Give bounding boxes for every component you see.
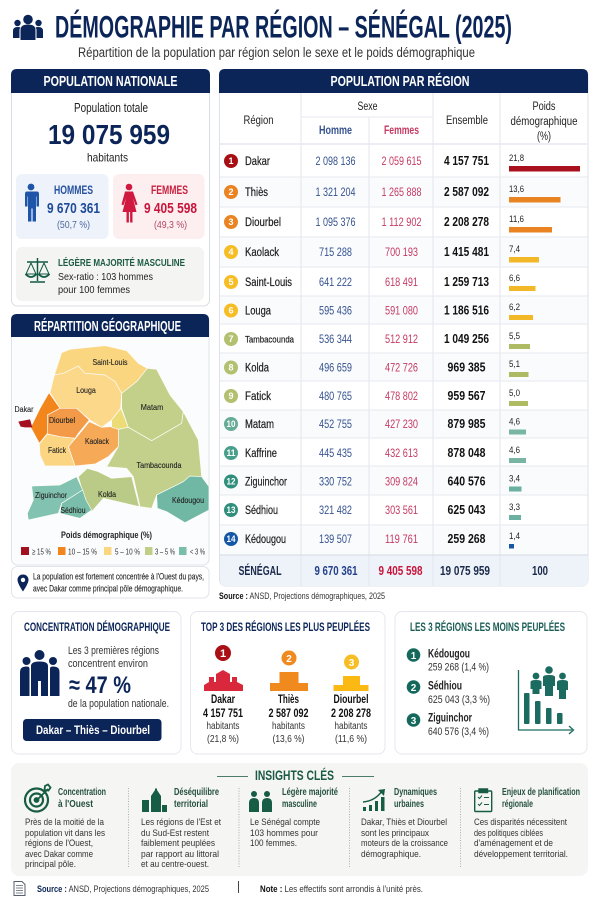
row: Thiès: 2 587 092 — [444, 185, 489, 199]
insight heading: masculine — [282, 799, 317, 810]
row: Louga: 595 436 — [319, 306, 352, 318]
row: Sédhiou: 321 482 — [319, 505, 352, 517]
top 2: Thiès: habitants — [272, 721, 305, 732]
insight body: Ces disparités nécessitent — [474, 817, 567, 827]
insight body: avec Dakar comme — [25, 849, 93, 859]
text: note carte: La population est fortement concentrée à l'Ouest du pays, — [33, 572, 204, 582]
row: Ziguinchor: 3,4 — [509, 474, 520, 484]
icon: growth chart — [363, 789, 385, 811]
icon: map pin — [18, 574, 28, 592]
row: Sédhiou — [224, 502, 521, 520]
map labels: Ziguinchor — [35, 490, 67, 500]
row: Saint-Louis: 5 — [228, 277, 234, 287]
text: note carte: avec Dakar comme principal pôle démographique. — [33, 584, 183, 594]
legend: poids démographique: 3 – 5 % — [155, 546, 175, 556]
row: Tambacounda: 536 344 — [319, 334, 352, 346]
text: 3 premières régions: concentrent environ — [68, 658, 148, 670]
insight body: moteurs de la croissance — [361, 838, 448, 848]
row: Dakar: 2 098 136 — [316, 156, 356, 168]
item: Kédougou: 259 268 (1,4 %) — [428, 662, 489, 674]
text: sex-ratio: pour 100 femmes — [58, 284, 130, 296]
insight: enjeux de planification — [474, 787, 580, 859]
big number: 47 %: ≈ 47 % — [69, 672, 131, 699]
table header labels: Sexe — [358, 101, 378, 113]
top 1: Dakar: (21,8 %) — [207, 734, 239, 745]
number: hommes: 9 670 361 — [47, 201, 100, 217]
header: répartition géographique — [11, 314, 209, 337]
row: Diourbel: 1 112 902 — [382, 217, 422, 229]
insight heading: urbaines — [394, 799, 424, 810]
insight heading: territorial — [174, 799, 208, 810]
top 2: Thiès: (13,6 %) — [272, 734, 304, 745]
row: Dakar: 21,8 — [509, 153, 524, 163]
row: Sédhiou: 3,3 — [509, 502, 520, 512]
insight heading: régionale — [502, 799, 533, 810]
top 3: Diourbel: 3 — [349, 658, 355, 669]
row: Ziguinchor: 330 752 — [319, 476, 352, 488]
icon: clipboard checklist — [475, 789, 492, 812]
icon: three people — [20, 650, 60, 696]
callout: légère majorité masculine — [16, 247, 204, 301]
row: Matam: 427 230 — [385, 419, 418, 431]
row: Diourbel: 2 208 278 — [444, 215, 489, 229]
top 1: Dakar: 1 — [220, 648, 226, 660]
map labels: Dakar — [14, 404, 34, 414]
row: Louga: Louga — [245, 306, 271, 318]
row: Dakar: 4 157 751 — [444, 154, 489, 168]
row: Kaffrine: 11 — [226, 448, 236, 458]
row: Fatick: 478 802 — [385, 391, 418, 403]
row: Kolda: 969 385 — [448, 360, 486, 374]
row: Kaolack: 715 288 — [319, 247, 352, 259]
row: Dakar: 2 059 615 — [382, 156, 422, 168]
row: Kolda: 8 — [228, 362, 234, 372]
row: Kaolack: Kaolack — [245, 247, 279, 259]
row: Kolda: Kolda — [245, 362, 269, 374]
badge: Dakar – Thiès – Diourbel: Dakar – Thiès – Diourbel — [36, 723, 150, 737]
row: Sédhiou: 13 — [226, 505, 236, 515]
row: Diourbel: 3 — [228, 217, 234, 227]
row: Fatick — [224, 388, 528, 406]
row: Matam: 452 755 — [319, 419, 352, 431]
item: Kédougou — [407, 648, 489, 674]
text: 3 premières régions — [68, 645, 159, 670]
insight body: du Sud-Est restent — [141, 828, 209, 838]
insight body: d'aménagement et de — [474, 838, 553, 848]
number: femmes: 9 405 598 — [144, 201, 197, 217]
insight body — [361, 817, 448, 859]
text: sex-ratio — [58, 271, 153, 296]
panel: population nationale — [11, 69, 210, 306]
legend: poids démographique — [21, 530, 205, 556]
row: total Sénégal: SÉNÉGAL — [238, 563, 282, 578]
row: Kédougou: 119 761 — [385, 534, 418, 546]
item: Kédougou: 1 — [411, 651, 417, 662]
row: Saint-Louis: 6,6 — [509, 273, 520, 283]
map labels: Matam — [141, 402, 163, 412]
table: row backgrounds and grid — [220, 93, 588, 586]
row: Ziguinchor: Ziguinchor — [245, 476, 287, 488]
table header labels: Poids — [532, 101, 556, 113]
top 2: Thiès: 2 587 092 — [268, 706, 309, 720]
top 1: Dakar — [203, 645, 243, 745]
header: population par région: POPULATION PAR RÉGION — [330, 73, 470, 90]
panel: répartition géographique — [11, 314, 209, 565]
row: Kolda: 472 726 — [385, 362, 418, 374]
row: Kaffrine: Kaffrine — [245, 448, 277, 460]
row: Tambacounda: 512 912 — [385, 334, 418, 346]
row: Thiès: 1 321 204 — [316, 187, 356, 199]
insight heading — [502, 787, 580, 810]
row: Sédhiou: 625 043 — [448, 503, 486, 517]
row: Kédougou: 1,4 — [509, 531, 520, 541]
header: population nationale — [11, 69, 210, 93]
insight body — [141, 817, 221, 869]
insight body: sont les principaux — [361, 828, 429, 838]
legend: poids démographique: ≥ 15 % — [32, 546, 51, 556]
icon: buildings — [142, 788, 167, 812]
map labels: Sédhiou — [60, 505, 86, 515]
icon: buildings — [204, 670, 243, 691]
header: population par région — [219, 69, 588, 93]
row: total Sénégal: 19 075 959 — [440, 563, 490, 578]
footer source: Source : ANSD, Projections démographiques, 2025 — [37, 884, 209, 894]
row: Thiès: 2 — [228, 187, 234, 197]
item: Sédhiou: 625 043 (3,3 %) — [428, 694, 490, 706]
top 3: Diourbel — [331, 654, 371, 745]
row: total Sénégal: 100 — [532, 563, 548, 578]
row: Sédhiou: Sédhiou — [245, 505, 278, 517]
row: Tambacounda: 5,5 — [509, 331, 520, 341]
row: Kolda: 5,1 — [509, 359, 520, 369]
table header labels: Ensemble — [446, 115, 488, 127]
row: Matam: 879 985 — [448, 417, 486, 431]
insight body: 100 femmes. — [250, 838, 297, 848]
row: Kaffrine: 4,6 — [509, 445, 520, 455]
footer note: Note : Les effectifs sont arrondis à l'unité près. — [260, 884, 423, 894]
row: Kaolack: 7,4 — [509, 244, 520, 254]
row: Matam: 10 — [226, 419, 236, 429]
map labels: Louga — [76, 385, 96, 395]
icon: orange podium — [270, 672, 308, 691]
map of Senegal — [14, 346, 209, 523]
table header labels: Région — [244, 115, 274, 127]
source: table: Source : ANSD, Projections démographiques, 2025 — [219, 591, 385, 601]
top 3: Diourbel: (11,6 %) — [335, 734, 367, 745]
row: Diourbel: 11,6 — [509, 214, 524, 224]
icon: man — [25, 184, 39, 222]
row: Saint-Louis: 618 491 — [385, 277, 418, 289]
insight heading — [394, 787, 437, 810]
insight body: par rapport au littoral — [141, 849, 219, 859]
badge: Dakar – Thiès – Diourbel — [23, 719, 162, 741]
row: Louga: 6,2 — [509, 302, 520, 312]
row: Ziguinchor: 12 — [226, 476, 236, 486]
insight: concentration à l'Ouest — [25, 784, 106, 869]
label: habitants: habitants — [87, 150, 128, 164]
row: Matam: Matam — [245, 419, 274, 431]
insight body — [250, 817, 320, 848]
row: Fatick: 480 765 — [319, 391, 352, 403]
legend: poids démographique: 5 – 10 % — [115, 546, 140, 556]
row: total Sénégal: 9 405 598 — [378, 563, 422, 578]
row: Tambacounda: 7 — [228, 334, 234, 344]
insight heading: Légère majorité — [282, 787, 338, 798]
icon: two people — [249, 791, 272, 812]
card: concentration démographique — [12, 612, 181, 754]
top 3: Diourbel: 2 208 278 — [331, 706, 371, 720]
row: Ziguinchor: 640 576 — [448, 474, 486, 488]
insight body: démographique. — [361, 849, 421, 859]
row: Kaffrine: 445 435 — [319, 448, 352, 460]
icon: woman — [122, 184, 138, 222]
insight heading — [58, 787, 106, 810]
row: Kaolack: 1 415 481 — [444, 245, 489, 259]
row: Kédougou: 139 507 — [319, 534, 352, 546]
insight heading: Concentration — [58, 787, 106, 798]
heading: insights clés: INSIGHTS CLÉS — [255, 767, 334, 783]
text: femmes: FEMMES — [151, 183, 188, 197]
insight heading — [282, 787, 338, 810]
subtitle: Répartition de la population par région selon le sexe et le poids démographique — [78, 45, 475, 60]
map labels: Saint-Louis — [92, 357, 128, 367]
row: Kaffrine: 432 613 — [385, 448, 418, 460]
legend: poids démographique: 10 – 15 % — [68, 546, 97, 556]
row: Fatick: 5,0 — [509, 388, 520, 398]
table header labels: Homme — [319, 125, 352, 137]
top 3: Diourbel: habitants — [334, 721, 368, 732]
text: sex-ratio: Sex-ratio : 103 hommes — [58, 271, 153, 283]
icon: scales — [26, 258, 50, 282]
insight body: Près de la moitié de la — [25, 817, 105, 827]
item: Ziguinchor: 3 — [411, 716, 417, 727]
row: Tambacounda: Tambacounda — [245, 334, 295, 346]
row: Dakar: 1 — [228, 156, 234, 166]
row: Louga: 591 080 — [385, 306, 418, 318]
card: moins peuplées — [395, 612, 587, 754]
row: Saint-Louis: 641 222 — [319, 277, 352, 289]
row: Tambacounda: 1 049 256 — [444, 332, 489, 346]
insight body: population vit dans les — [25, 828, 105, 838]
row: total Sénégal: 9 670 361 — [314, 563, 358, 578]
row: Thiès: 1 265 888 — [382, 187, 422, 199]
insight body: 103 hommes pour — [250, 828, 318, 838]
table header labels: démographique — [510, 116, 578, 128]
row: Kolda — [224, 359, 528, 377]
table header labels — [244, 101, 578, 143]
row: Fatick: 9 — [228, 391, 234, 401]
text: 3 premières régions: Les 3 premières régions — [68, 645, 159, 657]
map labels: Kaolack — [85, 436, 110, 446]
insight: légère majorité masculine — [249, 787, 338, 848]
row: Kaffrine — [224, 445, 526, 463]
row: Kédougou: 259 268 — [448, 532, 486, 546]
insight body: des politiques ciblées — [474, 828, 543, 838]
item: Kédougou: Kédougou — [428, 648, 470, 660]
insight body: Le Sénégal compte — [250, 817, 320, 827]
top 1: Dakar: 4 157 751 — [203, 706, 243, 720]
total population number: 19 075 959 — [48, 119, 170, 150]
icon: document — [14, 882, 25, 896]
text: note carte — [33, 572, 204, 594]
top 2: Thiès: 2 — [286, 654, 292, 665]
card: top 3 régions — [190, 612, 385, 754]
row: Thiès: Thiès — [245, 187, 268, 199]
percent: hommes: (50,7 %) — [57, 219, 90, 231]
row: Diourbel — [224, 214, 552, 232]
map labels: Tambacounda — [136, 460, 182, 470]
card: femmes — [113, 174, 204, 239]
row: Thiès — [224, 184, 560, 202]
row: Saint-Louis: Saint-Louis — [245, 277, 292, 289]
row: Kaolack: 700 193 — [385, 247, 418, 259]
item: Sédhiou: Sédhiou — [428, 680, 462, 692]
legend: poids démographique: < 3 % — [190, 546, 205, 556]
row: Fatick: 959 567 — [448, 389, 486, 403]
top 1: Dakar: Dakar — [211, 694, 235, 706]
insight heading: Déséquilibre — [174, 787, 219, 798]
item: Ziguinchor — [407, 712, 489, 738]
row: Kédougou — [224, 531, 520, 548]
heading: top 3: TOP 3 DES RÉGIONS LES PLUS PEUPLÉES — [201, 619, 370, 634]
icon: people group — [13, 15, 43, 40]
top 3: Diourbel: Diourbel — [334, 694, 368, 706]
icon: yellow podium — [334, 676, 368, 691]
map labels: Kolda — [98, 489, 116, 499]
row: Tambacounda — [224, 331, 530, 349]
insight body: Les régions de l'Est et — [141, 817, 221, 827]
panel: insights clés — [11, 763, 588, 876]
header: répartition géographique: RÉPARTITION GÉOGRAPHIQUE — [34, 318, 181, 335]
insight body: régions de l'Ouest, — [25, 838, 93, 848]
header: population nationale: POPULATION NATIONALE — [44, 73, 178, 90]
row: Louga: 1 186 516 — [444, 304, 489, 318]
icon: target — [25, 784, 50, 812]
row: Dakar: Dakar — [245, 156, 270, 168]
label: population totale: Population totale — [74, 101, 148, 115]
row: Kaolack — [224, 244, 539, 262]
row: Ziguinchor — [224, 474, 522, 492]
row: Diourbel: 1 095 376 — [316, 217, 356, 229]
insight body: développement territorial. — [474, 849, 568, 859]
row: Kaolack: 4 — [228, 247, 234, 257]
table header labels: Femmes — [384, 125, 419, 137]
row: Diourbel: Diourbel — [245, 217, 281, 229]
insight body: et au centre-ouest. — [141, 859, 209, 869]
row: Saint-Louis — [224, 273, 536, 291]
insight body — [25, 817, 105, 869]
callout: concentration à l'Ouest — [12, 566, 209, 598]
map labels: Fatick — [48, 445, 67, 455]
item: Ziguinchor: Ziguinchor — [428, 712, 472, 724]
item: Sédhiou — [407, 680, 490, 706]
map labels: Diourbel — [49, 415, 75, 425]
heading: concentration: CONCENTRATION DÉMOGRAPHIQUE — [24, 619, 170, 634]
icon: bar chart with people — [518, 666, 574, 734]
row: Kédougou: 14 — [226, 534, 236, 544]
row: Kédougou: Kédougou — [245, 534, 286, 546]
row: Sédhiou: 303 561 — [385, 505, 418, 517]
top 2: Thiès — [268, 650, 309, 745]
map labels: Kédougou — [172, 495, 204, 505]
insight heading — [174, 787, 219, 810]
row: Louga — [224, 302, 533, 320]
item: Ziguinchor: 640 576 (3,4 %) — [428, 726, 489, 738]
text: hommes: HOMMES — [54, 183, 93, 197]
row: total Sénégal — [238, 563, 548, 578]
row: Kolda: 496 659 — [319, 362, 352, 374]
row: Matam — [224, 416, 526, 434]
map labels — [14, 357, 204, 515]
panel: population par région — [219, 69, 588, 586]
row: Matam: 4,6 — [509, 416, 520, 426]
row: Thiès: 13,6 — [509, 184, 524, 194]
top 1: Dakar: habitants — [206, 721, 240, 732]
insight body — [474, 817, 568, 859]
insight body: faiblement peuplées — [141, 838, 215, 848]
insight heading: à l'Ouest — [58, 799, 94, 810]
insight body: Dakar, Thiès et Diourbel — [361, 817, 447, 827]
legend: poids démographique: Poids démographique (%) — [61, 530, 152, 541]
insight: dynamiques urbaines — [361, 787, 448, 859]
insight heading: Dynamiques — [394, 787, 437, 798]
row: Saint-Louis: 1 259 713 — [444, 275, 489, 289]
heading: légère majorité: LÉGÈRE MAJORITÉ MASCULINE — [58, 256, 185, 269]
row: Fatick: Fatick — [245, 391, 271, 403]
text: population nationale: de la population nationale. — [68, 698, 169, 710]
top 2: Thiès: Thiès — [278, 694, 299, 706]
row: Louga: 6 — [228, 306, 234, 316]
item: Sédhiou: 2 — [411, 683, 417, 694]
insight: déséquilibre territorial — [141, 787, 221, 869]
row: Dakar — [224, 153, 580, 172]
row: Ziguinchor: 309 824 — [385, 476, 418, 488]
row: Kaffrine: 878 048 — [448, 446, 486, 460]
percent: femmes: (49,3 %) — [154, 219, 187, 231]
card: hommes — [16, 174, 108, 239]
table header labels: (%) — [537, 131, 551, 143]
insight body: principal pôle. — [25, 859, 76, 869]
